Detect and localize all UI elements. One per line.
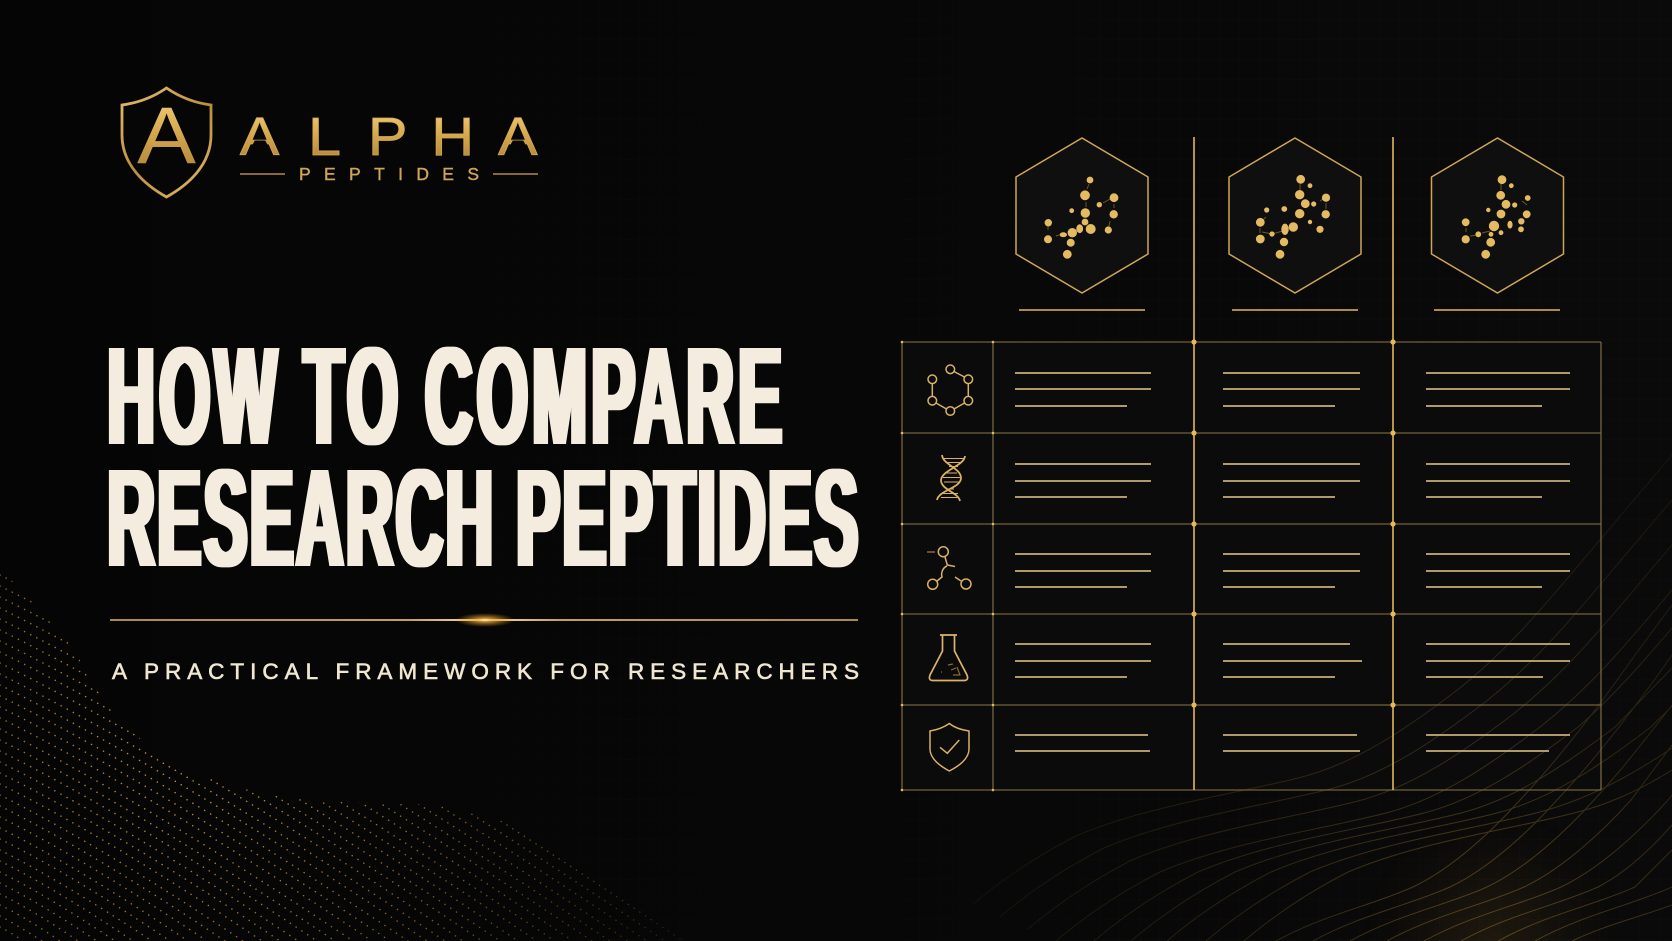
icon: branched molecule xyxy=(927,547,971,589)
icon: logo shield xyxy=(122,88,211,197)
logo wordmark: ALPHA: ALPHA xyxy=(240,107,538,167)
row 5 placeholder text lines xyxy=(1015,735,1570,751)
title: RESEARCH PEPTIDES xyxy=(108,441,858,597)
column 3 header underline xyxy=(1434,309,1560,311)
column dividers with nodes xyxy=(901,137,1396,791)
icon: shield with check xyxy=(930,724,969,771)
icon: molecule ring xyxy=(928,365,973,415)
icon: DNA helix xyxy=(937,455,965,501)
icon: logo shield: A xyxy=(137,92,196,182)
column 2 header: hexagon with molecule xyxy=(1229,138,1361,293)
background xyxy=(1220,0,1672,941)
logo: Alpha Peptides xyxy=(122,88,538,197)
column 2 header underline xyxy=(1232,309,1358,311)
table grid lines xyxy=(902,342,1601,790)
title: HOW TO COMPARE xyxy=(108,319,782,475)
title xyxy=(108,319,858,597)
logo sub-wordmark: PEPTIDES: PEPTIDES xyxy=(299,164,479,184)
icon: lab flask xyxy=(929,635,968,680)
flowing line decoration: bottom right xyxy=(972,455,1672,941)
panel: table background xyxy=(902,342,1601,790)
row 1 placeholder text lines xyxy=(1015,373,1570,406)
column 3 header: hexagon with molecule xyxy=(1432,138,1564,293)
row 3 placeholder text lines xyxy=(1015,554,1570,587)
row 4 placeholder text lines xyxy=(1015,644,1570,677)
column 1 header: hexagon with molecule xyxy=(1016,138,1148,293)
row 2 placeholder text lines xyxy=(1015,464,1570,497)
divider with glow xyxy=(110,613,858,627)
dotted wave decoration: bottom left xyxy=(0,574,681,941)
column 1 header underline xyxy=(1019,309,1145,311)
subtitle: A PRACTICAL FRAMEWORK FOR RESEARCHERS xyxy=(112,659,859,684)
